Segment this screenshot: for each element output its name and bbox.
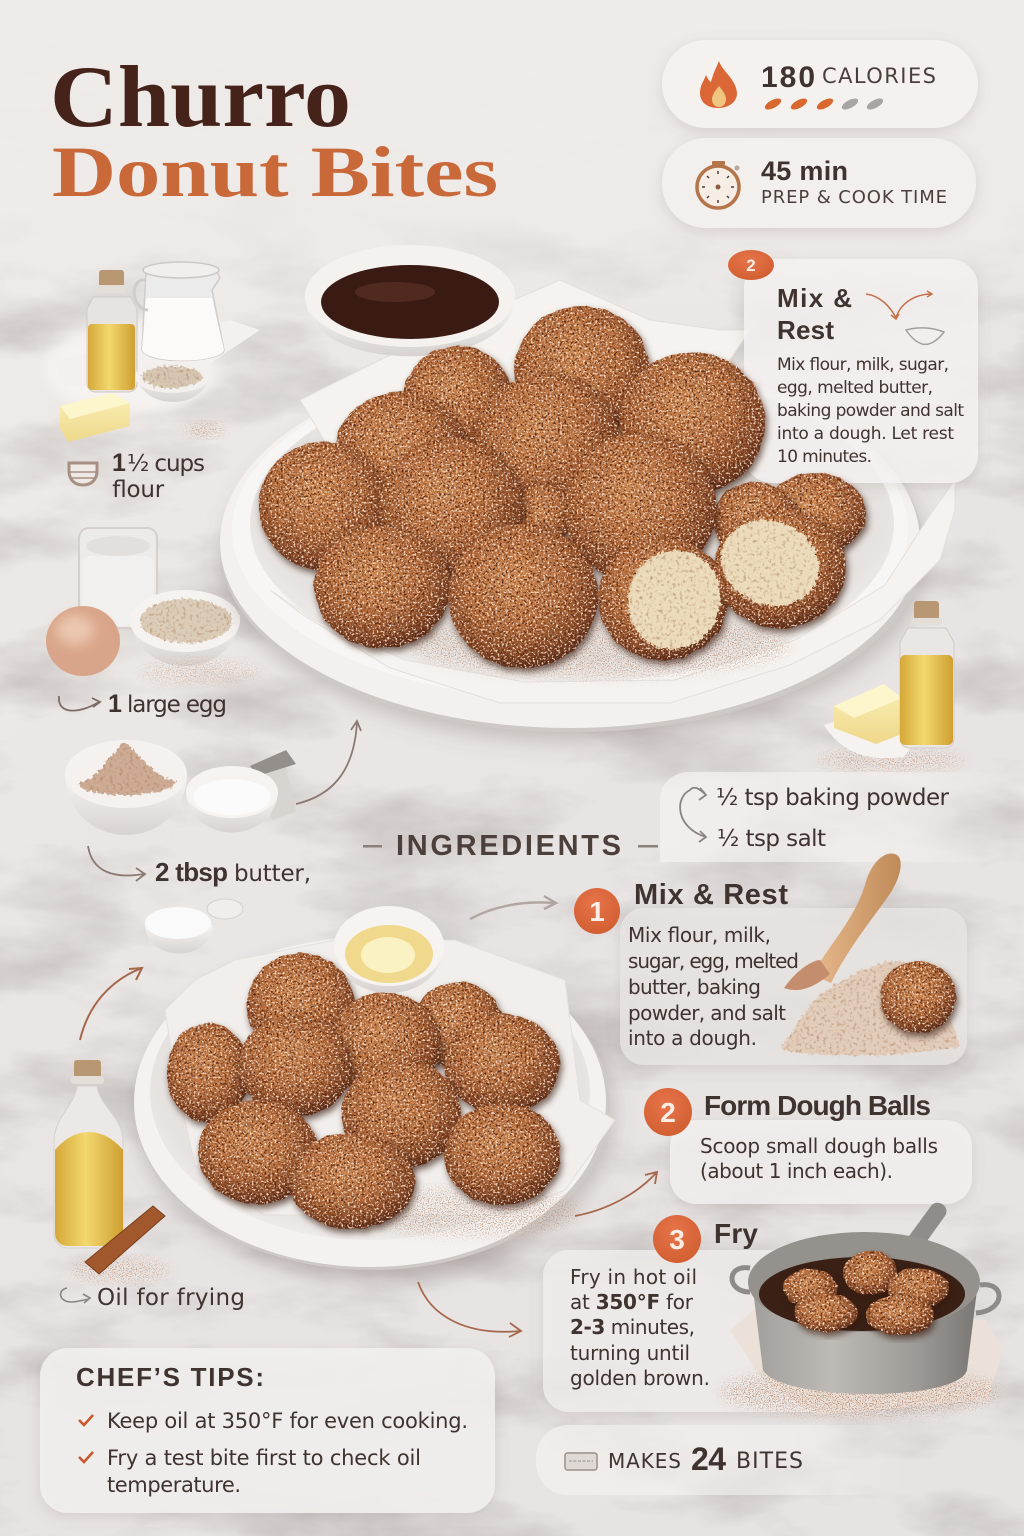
arrow: shaker to plate (296, 721, 361, 804)
ingredients group: oil bottle and cinnamon (54, 1060, 170, 1282)
arrow: to step 2 (575, 1172, 657, 1216)
body: baking powder and salt (777, 401, 964, 421)
ingredients group: oil, milk, bowl, butter (45, 262, 260, 442)
ingredients group: jar, egg, sugar bowl (46, 528, 260, 684)
body: Fry in hot oil (570, 1265, 697, 1289)
text: makes: MAKES (608, 1449, 681, 1473)
icon: oil bottle (87, 270, 137, 392)
ingredients group: cinnamon bowl, salt bowl, shaker (65, 740, 296, 835)
plate dish (220, 356, 924, 732)
text: butter: 2 tbsp (155, 857, 228, 887)
body (700, 1134, 938, 1183)
icon: cinnamon stick (85, 1206, 165, 1274)
time value: PREP & COOK TIME (761, 187, 947, 208)
body: into a dough. (628, 1026, 757, 1050)
icon: stopwatch (697, 161, 740, 208)
text: salt: ½ tsp salt (717, 826, 826, 852)
arrow: to step 1 (470, 896, 556, 919)
text: flour: ½ cups (127, 451, 205, 477)
arrows (680, 788, 706, 842)
body: 2-3 minutes, (570, 1315, 695, 1339)
icon: cinnamon bowl (65, 740, 187, 835)
ingredients group: butter and oil right (815, 601, 965, 770)
body: Mix flour, milk, sugar, (777, 355, 949, 375)
body (570, 1265, 710, 1390)
badge 1: 1 (589, 896, 605, 927)
butter bowl (334, 906, 444, 993)
icon: seasoning bowl (135, 361, 210, 402)
plate dish (134, 937, 610, 1270)
body: powder, and salt (628, 1001, 786, 1025)
text: butter: butter, (234, 861, 311, 887)
icon: salt shaker (250, 750, 296, 820)
text: flour (112, 449, 205, 503)
icon: frying pot (732, 1203, 999, 1394)
calories value: CALORIES (822, 64, 936, 88)
arrow: butter (88, 846, 145, 881)
body: into a dough. Let rest (777, 424, 954, 444)
arrow: egg (59, 696, 100, 711)
chocolate sauce bowl (305, 245, 515, 356)
tip 2: temperature. (107, 1473, 241, 1497)
parchment under pot (730, 1305, 1003, 1415)
plate: hero dish and parchment (220, 280, 955, 732)
body: Mix flour, milk, (628, 923, 771, 947)
tip 2: Fry a test bite first to check oil (107, 1446, 421, 1470)
heading: Mix & Rest (634, 879, 788, 911)
icon: tray (565, 1453, 597, 1470)
bitten donut interiors (617, 506, 831, 660)
time value (761, 156, 947, 208)
donut bites (167, 953, 560, 1229)
body: golden brown. (570, 1366, 710, 1390)
body (628, 923, 799, 1050)
text: flour: 1 (112, 449, 126, 477)
icon: flame (700, 61, 737, 108)
icon: sugar bowl (130, 590, 240, 666)
badge 3 (653, 1215, 701, 1263)
heading: ingredients: INGREDIENTS (396, 830, 621, 862)
body: butter, baking (628, 975, 761, 999)
panel: chef's tips (40, 1348, 495, 1513)
heading: Rest (777, 315, 834, 345)
heading: Form Dough Balls (704, 1090, 931, 1121)
heading: Fry (714, 1218, 758, 1249)
body: sugar, egg, melted (628, 949, 799, 973)
arrow: to step 3 (418, 1282, 521, 1337)
text: oil: Oil for frying (97, 1285, 245, 1311)
plate: hero donut bites (259, 245, 866, 668)
tip 1: Keep oil at 350°F for even cooking. (107, 1409, 468, 1433)
body: 10 minutes. (777, 447, 872, 467)
panel: baking powder and salt (660, 772, 1010, 862)
icon: salt bowl (186, 766, 278, 832)
panel: makes (536, 1425, 906, 1495)
text: butter (155, 857, 311, 887)
body: at 350°F for (570, 1290, 694, 1314)
text: egg: large egg (127, 692, 227, 718)
text: egg: 1 (108, 690, 122, 718)
panel: step card text Mix & Rest (728, 250, 964, 467)
badge 1 (574, 888, 620, 934)
tip 2 (79, 1446, 421, 1497)
panel background: step card Mix & Rest (744, 259, 978, 483)
calories value (761, 61, 936, 94)
badge 2: 2 (660, 1097, 676, 1128)
icon: chili rating (763, 96, 885, 112)
icon: spoon and dough with ball (780, 853, 960, 1056)
icon: butter (834, 684, 902, 744)
parchment (165, 940, 615, 1215)
badge 2 (644, 1088, 692, 1136)
donut bites (259, 306, 866, 668)
arrow: oil (61, 1288, 90, 1303)
body (777, 355, 964, 467)
text: makes: BITES (736, 1449, 803, 1474)
text: makes (608, 1441, 803, 1477)
title: Donut Bites (52, 132, 498, 212)
small salt scoop (145, 899, 243, 954)
icon: butter (60, 393, 130, 442)
body: turning until (570, 1341, 690, 1365)
badge 2: 2 (746, 256, 756, 275)
heading (777, 283, 852, 345)
heading: Mix & (777, 283, 852, 313)
text: flour: flour (112, 477, 165, 503)
plate: second donut plate (134, 906, 615, 1270)
calories value: 180 (761, 61, 815, 94)
parchment (270, 280, 955, 703)
panel: time (662, 138, 976, 228)
panel: calories (662, 40, 978, 128)
body: (about 1 inch each). (700, 1159, 893, 1183)
step 3 panel (543, 1203, 1003, 1416)
heading: CHEF’S TIPS: (76, 1362, 264, 1392)
step 1 panel (574, 853, 967, 1065)
icon: oil bottle (900, 601, 954, 748)
title: Churro (50, 49, 351, 146)
badge 2 (728, 250, 774, 280)
icon: glass jar (79, 528, 157, 628)
icon: oil bottle (54, 1060, 123, 1248)
icon: egg (46, 606, 120, 676)
body: egg, melted butter, (777, 378, 933, 398)
badge 3: 3 (669, 1224, 685, 1255)
body: Scoop small dough balls (700, 1134, 938, 1158)
arrow: oil to plate (80, 968, 142, 1040)
icon: measuring bowl (69, 463, 97, 485)
step 2 panel (644, 1088, 972, 1204)
icon: milk jug (134, 262, 224, 361)
time value: 45 min (761, 156, 848, 186)
text: baking powder: ½ tsp baking powder (716, 785, 950, 811)
icon: whisk arrows (866, 291, 944, 344)
text: makes: 24 (691, 1441, 726, 1477)
title (50, 49, 498, 212)
